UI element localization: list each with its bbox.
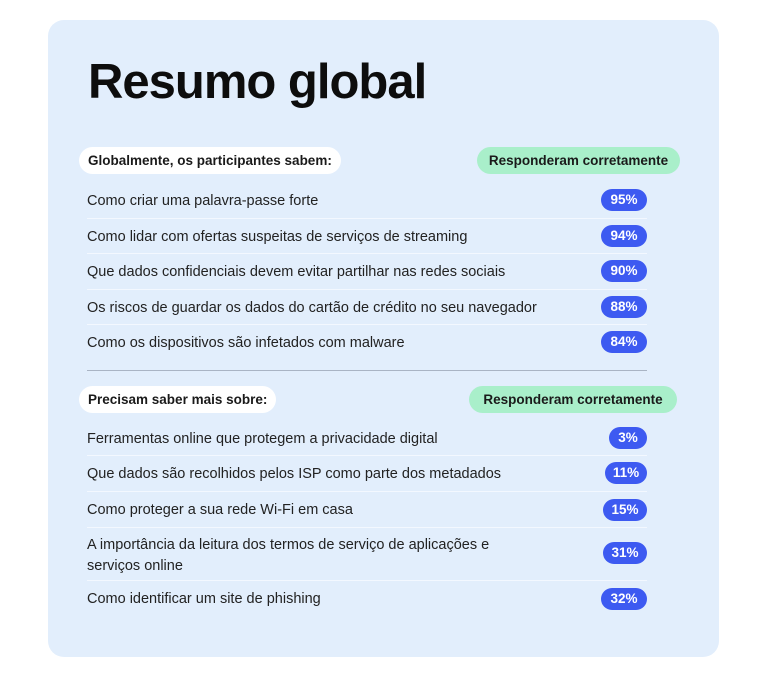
row 8 (87, 492, 647, 528)
row 2 (87, 219, 647, 254)
row 3 (87, 254, 647, 290)
row 10: Como identificar um site de phishing (87, 591, 321, 607)
row 2: Como lidar com ofertas suspeitas de serviços de streaming (87, 229, 467, 245)
row 3: 90% (610, 263, 638, 278)
row 3: Que dados confidenciais devem evitar partilhar nas redes sociais (87, 264, 505, 280)
header: need to know: Precisam saber mais sobre: (88, 392, 267, 407)
row 5: Como os dispositivos são infetados com malware (87, 335, 405, 351)
row 4: 88% (610, 299, 638, 314)
header: known (79, 147, 341, 174)
header pill: correct answers 2 (469, 386, 677, 413)
row 9: serviços online (87, 558, 183, 574)
row 8: 15% (611, 502, 639, 517)
row 4: Os riscos de guardar os dados do cartão de crédito no seu navegador (87, 300, 537, 316)
row 2: 94% (610, 228, 638, 243)
row 1 (87, 183, 647, 219)
row 7: 11% (613, 465, 639, 480)
row 8: Como proteger a sua rede Wi-Fi em casa (87, 502, 353, 518)
title: Resumo global (88, 55, 426, 109)
header pill: correct answers (477, 147, 680, 174)
row 7: Que dados são recolhidos pelos ISP como parte dos metadados (87, 466, 501, 482)
row 9: A importância da leitura dos termos de serviço de aplicações e (87, 537, 489, 553)
row 6: Ferramentas online que protegem a privacidade digital (87, 431, 438, 447)
row 5 (87, 331, 647, 353)
row 9 (87, 528, 647, 581)
row 6: 3% (618, 430, 638, 445)
row 9: 31% (611, 545, 639, 560)
row 5: 84% (610, 334, 638, 349)
header pill: correct answers 2: Responderam corretamente (483, 392, 663, 407)
row 6 (87, 421, 647, 456)
row 10 (87, 588, 647, 610)
header: need to know (79, 386, 276, 413)
row 1: 95% (610, 192, 638, 207)
row 1: Como criar uma palavra-passe forte (87, 193, 318, 209)
row 7 (87, 456, 647, 492)
header: known: Globalmente, os participantes sabem: (88, 153, 332, 168)
row 10: 32% (610, 591, 638, 606)
row 4 (87, 290, 647, 325)
header pill: correct answers: Responderam corretamente (489, 153, 668, 168)
